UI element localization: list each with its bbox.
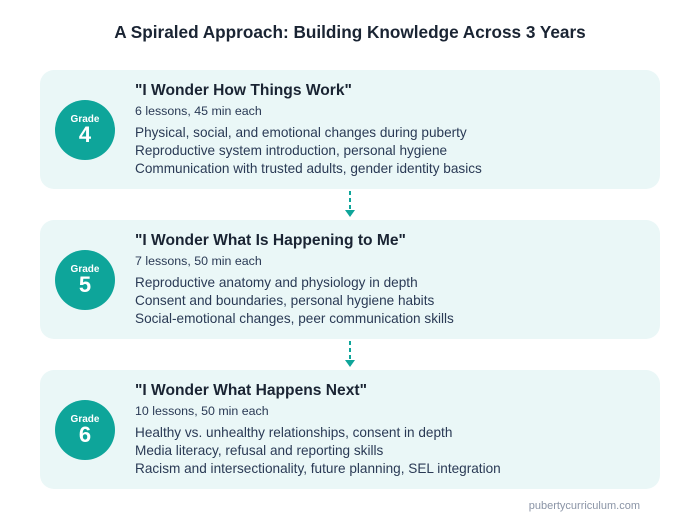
text: grade 5: "I Wonder What Is Happening to Me"	[135, 232, 406, 249]
title: A Spiraled Approach: Building Knowledge Across 3 Years	[114, 22, 586, 42]
text: grade 6: 10 lessons, 50 min each	[135, 404, 269, 418]
icon: grade 5 badge: 5	[79, 272, 91, 297]
icon: grade 4 badge: Grade	[71, 114, 99, 125]
footer source: pubertycurriculum.com	[529, 500, 640, 512]
icon: grade 6 badge	[55, 400, 115, 460]
panel: grade 6	[40, 370, 660, 489]
text: grade 4: Communication with trusted adults, gender identity basics	[135, 161, 482, 176]
text: grade 5: 7 lessons, 50 min each	[135, 254, 262, 268]
text: grade 5: Social-emotional changes, peer communication skills	[135, 311, 454, 326]
text: grade 4: 6 lessons, 45 min each	[135, 104, 262, 118]
arrow	[345, 191, 355, 217]
text: grade 4: Reproductive system introduction, personal hygiene	[135, 143, 447, 158]
icon: grade 4 badge	[55, 100, 115, 160]
icon: grade 6 badge: Grade	[71, 414, 99, 425]
arrow	[345, 341, 355, 367]
text: grade 6: Media literacy, refusal and reporting skills	[135, 443, 383, 458]
text: grade 5: Consent and boundaries, personal hygiene habits	[135, 293, 434, 308]
text: grade 4: Physical, social, and emotional changes during puberty	[135, 125, 467, 140]
icon: grade 6 badge: 6	[79, 422, 91, 447]
text: grade 4: "I Wonder How Things Work"	[135, 82, 352, 99]
panel: grade 4	[40, 70, 660, 189]
text: grade 5	[135, 232, 454, 326]
text: grade 6: Racism and intersectionality, future planning, SEL integration	[135, 461, 501, 476]
text: grade 6	[135, 382, 501, 476]
icon: grade 5 badge: Grade	[71, 264, 99, 275]
panel: grade 5	[40, 220, 660, 339]
text: grade 4	[135, 82, 482, 176]
text: grade 5: Reproductive anatomy and physiology in depth	[135, 275, 418, 290]
icon: grade 5 badge	[55, 250, 115, 310]
text: grade 6: Healthy vs. unhealthy relationships, consent in depth	[135, 425, 452, 440]
icon: grade 4 badge: 4	[79, 122, 91, 147]
text: grade 6: "I Wonder What Happens Next"	[135, 382, 367, 399]
